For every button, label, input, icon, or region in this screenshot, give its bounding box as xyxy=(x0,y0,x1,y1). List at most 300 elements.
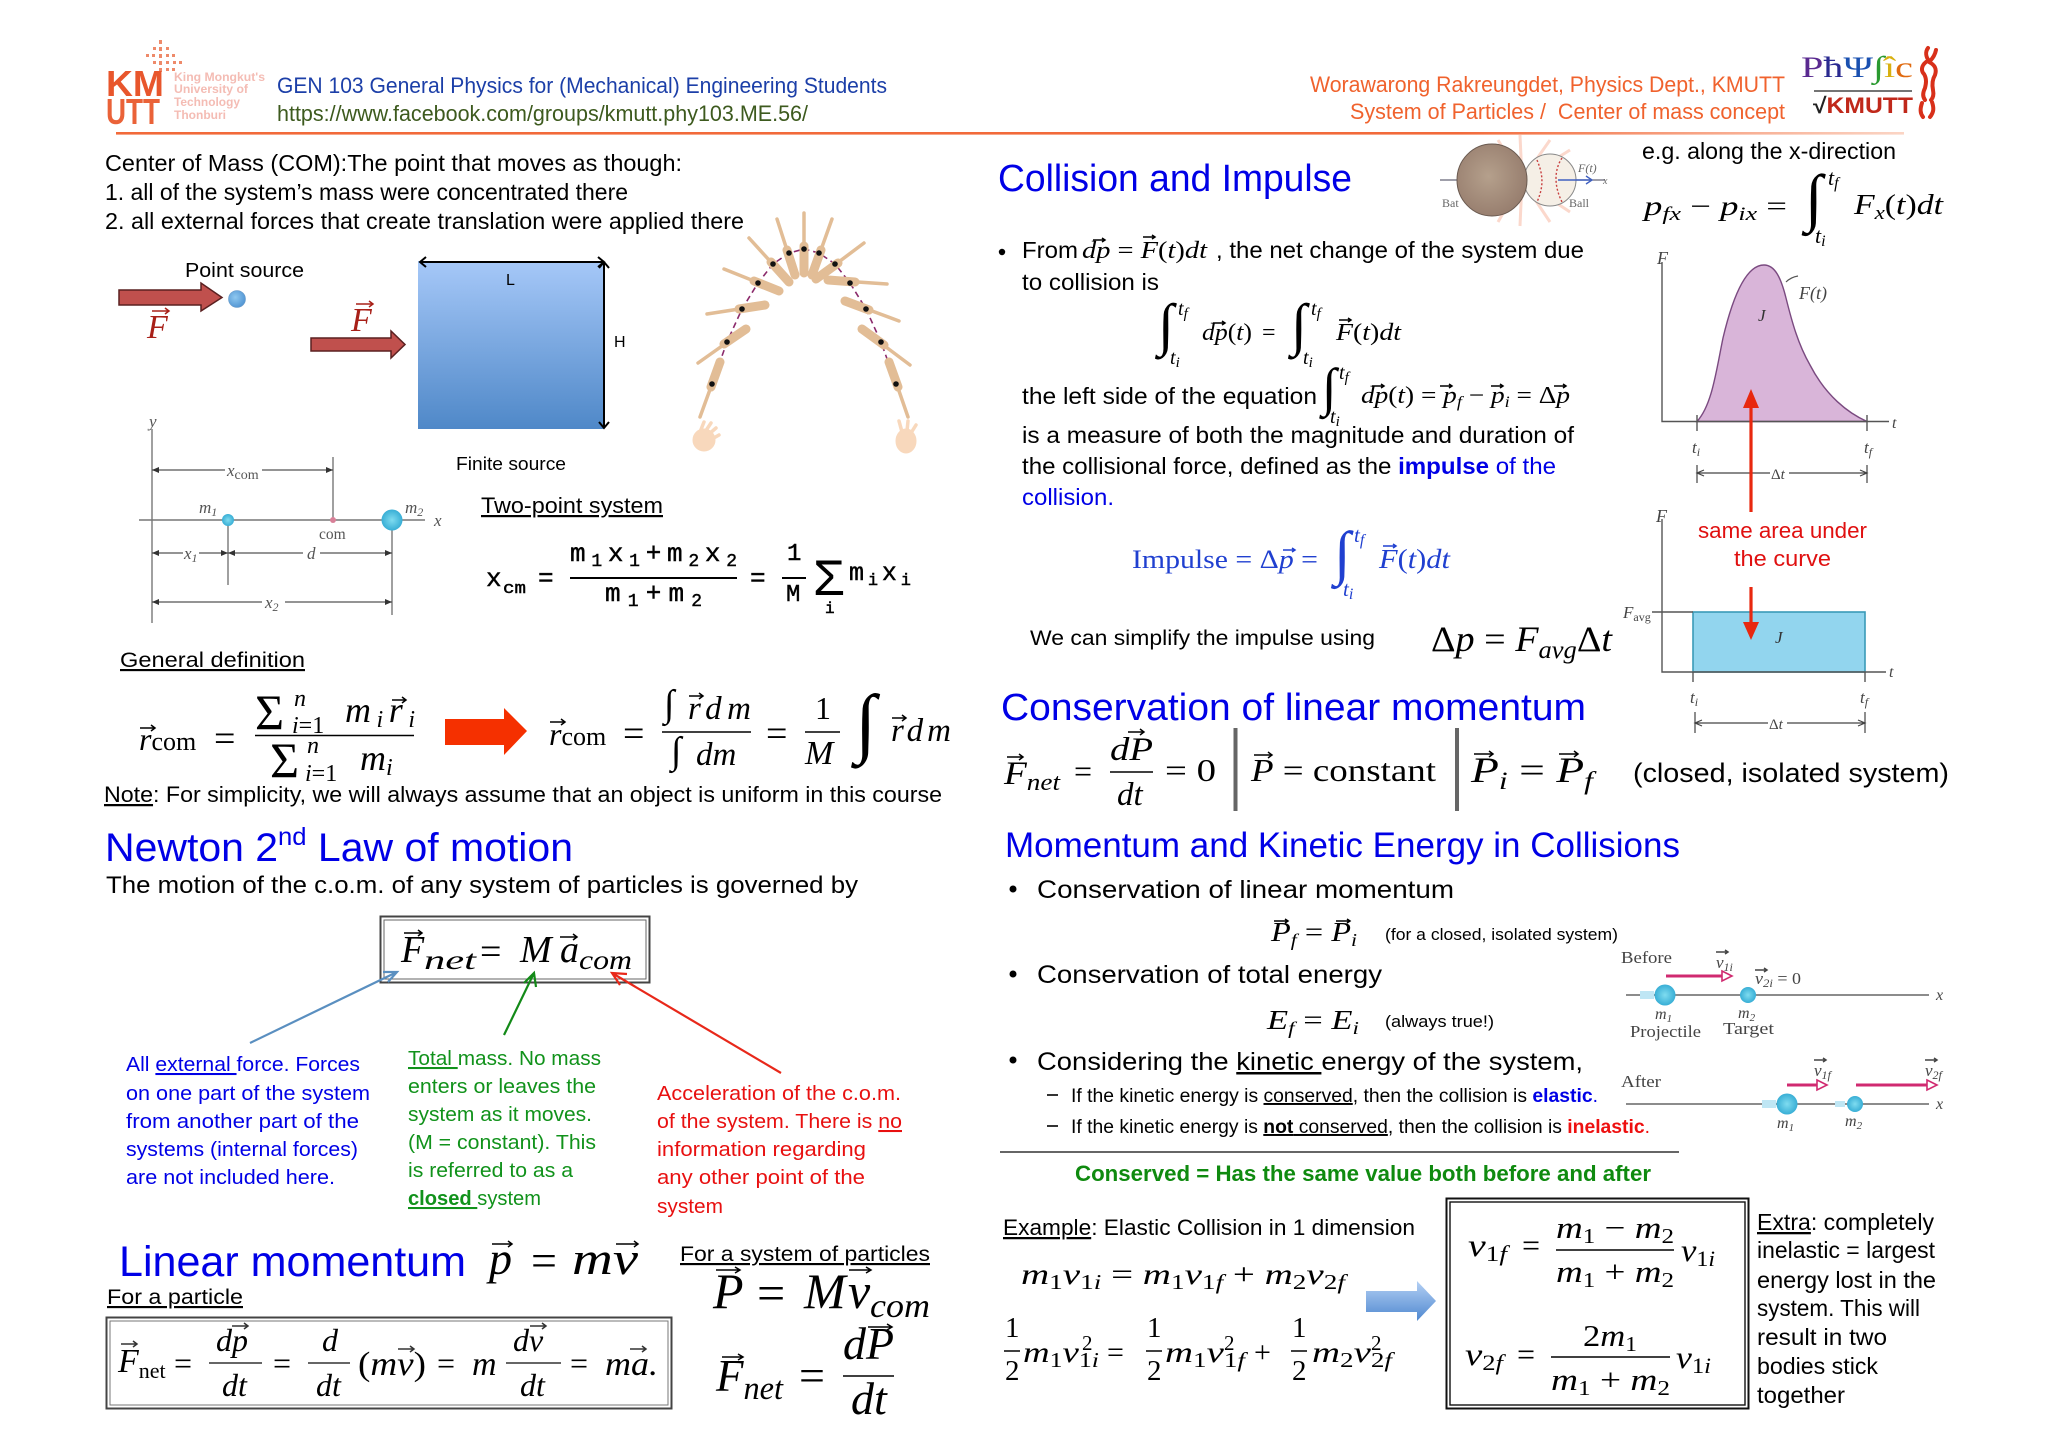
header: KMUTT logo: UTT xyxy=(106,91,160,132)
equation: com continuous: rdm xyxy=(688,691,751,727)
panel: newton second law xyxy=(105,823,902,1218)
equation: Pi = Pf: = xyxy=(1508,750,1556,790)
equation: two-point center of mass: +m xyxy=(646,579,684,609)
equation: com discrete: i xyxy=(408,707,415,733)
equation: x-direction impulse: fx xyxy=(1662,204,1682,225)
chart: force curve F(t) xyxy=(1656,248,1897,483)
label: point source: Point source xyxy=(185,259,304,282)
text: left side of the equation: p xyxy=(1491,383,1503,409)
equation: momentum: m xyxy=(1021,1258,1043,1291)
illustration: tossed bat trajectory xyxy=(693,213,916,453)
result box: final velocities: m xyxy=(1635,1254,1657,1289)
equation: dp = Favg dt: avg xyxy=(1539,637,1577,664)
chart: before collision: 2 xyxy=(1750,1012,1756,1024)
equation: P = M v_com: com xyxy=(870,1288,930,1325)
chart: average force rectangle: Δt xyxy=(1769,717,1784,733)
heading: newton 2nd law: Law of motion xyxy=(307,826,573,870)
chart: two-point com diagram: 1 xyxy=(192,551,198,565)
equation: integral of dp: t xyxy=(1303,347,1309,369)
result box: final velocities: 1f xyxy=(1486,1241,1506,1266)
header: KMUTT logo: University of xyxy=(174,84,248,96)
heading: momentum and kinetic energy: Momentum and Kinetic Energy in Collisions xyxy=(1005,826,1680,865)
equation: momentum: 2f xyxy=(1324,1270,1343,1294)
chart: after collision: v xyxy=(1814,1061,1822,1080)
result box: final velocities: v xyxy=(1681,1232,1695,1268)
chart: two-point com diagram: x xyxy=(433,511,442,530)
illustration: bat and ball: Ball xyxy=(1569,196,1590,210)
chart: after collision: After xyxy=(1621,1072,1661,1091)
arrow: green to mass xyxy=(504,973,536,1035)
text: extra note: inelastic = largest xyxy=(1757,1237,1936,1263)
center of mass definition: 1. all of the system’s mass were concentrated there xyxy=(105,179,628,205)
heading: conservation of linear momentum: Conservation of linear momentum xyxy=(1001,687,1586,729)
equation: kinetic energy: 2 xyxy=(1371,1331,1382,1355)
equation box: derivative of momentum: m xyxy=(472,1346,497,1383)
result box: final velocities: 2 xyxy=(1661,1224,1674,1248)
equation: two-point center of mass: m xyxy=(849,559,864,588)
equation box: Fnet = M a_com: net xyxy=(424,945,478,975)
equation: kinetic energy: v xyxy=(1207,1336,1225,1369)
equation: F_net = dP/dt: net xyxy=(744,1371,784,1407)
label: same area under the curve xyxy=(1698,518,1867,571)
equation: momentum: v xyxy=(1185,1258,1203,1291)
equation: two-point center of mass: i xyxy=(901,572,911,591)
chart: average force rectangle: F xyxy=(1623,603,1633,622)
text: extra note xyxy=(1757,1209,1936,1408)
equation: x-direction impulse: F xyxy=(1854,190,1871,221)
equation: kinetic energy: 2 xyxy=(1005,1355,1020,1387)
chart: two-point com diagram xyxy=(139,412,442,623)
equation: x-direction impulse: x xyxy=(1873,203,1886,224)
illustration: bat and ball: Bat xyxy=(1442,196,1459,210)
text: from dp = F dt: to collision is xyxy=(1022,269,1159,295)
equation box: derivative of momentum: dt xyxy=(316,1367,342,1403)
equation: integral of dp: F(t)dt xyxy=(1335,320,1403,346)
heading: linear momentum: Linear momentum xyxy=(119,1238,466,1286)
text: extra note: energy lost in the xyxy=(1757,1267,1936,1293)
chart: after collision: m xyxy=(1845,1113,1857,1130)
text: left side of the equation: i xyxy=(1336,414,1340,430)
text: impulse definition xyxy=(1022,422,1575,510)
heading: two-point system: Two-point system xyxy=(481,493,663,518)
equation box: derivative of momentum: = xyxy=(174,1345,192,1381)
annotation: external force xyxy=(126,1053,370,1189)
equation: p = mv: p xyxy=(486,1233,512,1284)
equation: com discrete: m xyxy=(345,690,371,730)
header: PhysIc KMUTT logo: PħΨ∫îc xyxy=(1801,51,1913,86)
chart: force curve F(t): F xyxy=(1656,248,1669,268)
equation box: derivative of momentum: F xyxy=(118,1343,139,1380)
result box: final velocities xyxy=(1446,1198,1748,1408)
equation: dP/dt = 0: = xyxy=(1074,753,1092,789)
equation: P = M v_com: = xyxy=(757,1265,785,1321)
chart: two-point com diagram: y xyxy=(147,412,157,431)
sub-bullet: inelastic: If the kinetic energy is not conserved, then the collision is inelastic. xyxy=(1071,1116,1650,1138)
panel: linear momentum xyxy=(106,1233,930,1424)
equation: com continuous: = xyxy=(623,713,644,755)
bullet: conservation of total energy: Conservation of total energy xyxy=(1037,961,1383,989)
chart: average force rectangle: t xyxy=(1690,688,1695,707)
label: for a system of particles: For a system of particles xyxy=(680,1242,930,1266)
illustration: bat and ball: F(t) xyxy=(1577,161,1597,175)
result box: final velocities: m xyxy=(1556,1254,1578,1289)
equation: Ef = Ei: E xyxy=(1331,1005,1348,1035)
text: left side of the equation xyxy=(1022,359,1570,430)
chart: two-point com diagram: 2 xyxy=(273,600,279,614)
chart: average force rectangle: i xyxy=(1695,695,1698,709)
divider rule xyxy=(1000,1151,1679,1153)
equation: kinetic energy: 1i xyxy=(1079,1348,1098,1372)
header: KMUTT logo: King Mongkut's xyxy=(174,72,265,84)
illustration: bat and ball: x xyxy=(1602,176,1608,187)
equation: kinetic energy: 2 xyxy=(1340,1348,1354,1372)
label: for a particle: For a particle xyxy=(107,1285,243,1309)
text: example heading: Example: Elastic Collision in 1 dimension xyxy=(1003,1215,1415,1240)
equation box: derivative of momentum: dt xyxy=(222,1367,248,1403)
text: left side of the equation: f xyxy=(1457,394,1465,411)
chart: two-point com diagram: m xyxy=(405,498,417,517)
chart: average force rectangle: J xyxy=(1775,628,1784,647)
equation: momentum: = xyxy=(1101,1258,1143,1291)
equation: Pi = Pf: f xyxy=(1584,768,1597,795)
equation: momentum: 1f xyxy=(1202,1270,1221,1294)
equation: kinetic energy: 1 xyxy=(1193,1348,1207,1372)
result box: final velocities: 1i xyxy=(1696,1246,1714,1271)
equation: x-direction impulse: = xyxy=(1757,191,1787,221)
equation: two-point center of mass: 2 xyxy=(688,552,699,572)
equation box: derivative of momentum: (mv) xyxy=(358,1346,426,1383)
equation: integral of dp: f xyxy=(1184,306,1190,322)
chart: average force rectangle xyxy=(1622,506,1894,733)
equation: integral of dp: = xyxy=(1262,320,1276,346)
chart: force curve F(t): F(t) xyxy=(1798,283,1827,304)
divider: bar one xyxy=(1234,728,1238,811)
header: author: Worawarong Rakreungdet, Physics Dept., KMUTT xyxy=(1310,72,1785,97)
equation: P = M v_com xyxy=(712,1263,930,1325)
equation: kinetic energy: 2 xyxy=(1292,1355,1306,1387)
equation: com discrete: m xyxy=(360,738,386,778)
equation: Ef = Ei: E xyxy=(1267,1005,1284,1035)
equation: com discrete: i=1 xyxy=(305,761,337,787)
equation: Pf = Pi: = xyxy=(1297,917,1331,947)
arrow: red to acceleration xyxy=(612,973,781,1073)
force label F finite: F xyxy=(350,302,373,339)
equation: Ef = Ei: f xyxy=(1288,1018,1298,1038)
chart: force curve F(t): t xyxy=(1892,415,1897,432)
equation: impulse xyxy=(1132,520,1452,603)
equation: two-point center of mass: 1 xyxy=(591,552,602,572)
text: along x direction: e.g. along the x-direction xyxy=(1642,138,1896,164)
equation: two-point center of mass: x xyxy=(608,539,623,569)
block dimensions L and H: L xyxy=(506,272,515,289)
annotation: acceleration: any other point of the xyxy=(657,1166,865,1189)
equation: two-point center of mass: 2 xyxy=(691,592,702,612)
force label F: F xyxy=(146,309,169,346)
text: from dp = F dt: From xyxy=(1022,237,1078,263)
equation: integral of dp: t xyxy=(1178,298,1184,320)
equation: Pf = Pi: (for a closed, isolated system) xyxy=(1385,926,1618,944)
result box: final velocities: v xyxy=(1676,1339,1690,1375)
header: KMUTT logo: Technology xyxy=(174,97,241,109)
result box: final velocities: 1 xyxy=(1578,1376,1591,1400)
equation: x-direction impulse: i xyxy=(1821,233,1826,250)
text: left side of the equation: f xyxy=(1345,370,1351,386)
icon: point source ball xyxy=(228,290,246,308)
heading: general definition: General definition xyxy=(120,648,305,672)
equation: kinetic energy: v xyxy=(1354,1336,1372,1369)
result box: final velocities: 2 xyxy=(1657,1376,1670,1400)
equation: P = M v_com: v xyxy=(848,1263,871,1319)
equation: com continuous: = xyxy=(766,713,787,755)
equation: kinetic energy: 1 xyxy=(1050,1348,1063,1372)
equation: impulse: i xyxy=(1349,586,1353,603)
equation: kinetic energy: = xyxy=(1107,1336,1124,1369)
header: course title: GEN 103 General Physics for (Mechanical) Engineering Students xyxy=(277,73,887,98)
chart: before collision: = 0 xyxy=(1773,969,1801,988)
equation: Pf = Pi xyxy=(1270,917,1618,950)
equation: Ef = Ei: (always true!) xyxy=(1385,1013,1494,1031)
chart: before collision: v xyxy=(1755,969,1763,988)
equation: Pi = Pf: i xyxy=(1499,768,1508,795)
equation: kinetic energy: 1 xyxy=(1147,1312,1162,1344)
equation: x-direction impulse: ∫ xyxy=(1801,162,1826,237)
equation: P = M v_com: M xyxy=(803,1263,848,1319)
chart: two-point com diagram: 2 xyxy=(417,505,423,519)
equation: Ef = Ei xyxy=(1266,1005,1494,1038)
equation: dP/dt = 0: net xyxy=(1027,770,1061,796)
annotation: external force: on one part of the system xyxy=(126,1082,370,1105)
equation: kinetic energy: 1 xyxy=(1005,1312,1020,1344)
equation: P constant: P = constant xyxy=(1250,752,1436,788)
equation: Ef = Ei: i xyxy=(1353,1018,1359,1038)
equation: two-point center of mass: x xyxy=(705,539,720,569)
result box: final velocities: = xyxy=(1517,1336,1535,1372)
bullet: conservation of linear momentum: Conservation of linear momentum xyxy=(1037,876,1454,904)
equation: x-direction impulse: t xyxy=(1815,223,1821,248)
result box: final velocities: + xyxy=(1591,1362,1630,1397)
equation: com discrete: i xyxy=(377,707,383,733)
text: left side of the equation: t xyxy=(1330,406,1336,428)
equation: kinetic energy: 2 xyxy=(1082,1331,1092,1355)
result box: final velocities: 2f xyxy=(1482,1350,1502,1375)
result box: final velocities: 2m xyxy=(1583,1318,1623,1353)
equation: dp = Favg dt: Δp = F xyxy=(1431,619,1537,659)
equation: two-point center of mass: cm xyxy=(503,580,526,599)
chart: average force rectangle: t xyxy=(1889,664,1894,681)
chart: after collision: 2f xyxy=(1933,1068,1944,1082)
equation: x-direction impulse: t xyxy=(1828,165,1834,190)
equation: com continuous: ∫ xyxy=(669,730,684,774)
chart: two-point com diagram: d xyxy=(307,544,316,563)
equation: F_net = dP/dt: F xyxy=(716,1350,744,1401)
equation: Pf = Pi: f xyxy=(1291,930,1300,950)
equation: momentum: + xyxy=(1223,1258,1265,1291)
annotation: total mass: enters or leaves the xyxy=(408,1075,596,1098)
chart: force curve F(t): J xyxy=(1758,306,1767,325)
equation: momentum: 1 xyxy=(1171,1270,1185,1294)
chart: before collision: v xyxy=(1716,953,1724,972)
result box: final velocities: v xyxy=(1468,1227,1482,1263)
result box: final velocities: 2 xyxy=(1661,1268,1674,1292)
chart: force curve F(t): t xyxy=(1864,438,1869,457)
annotation: total mass: Total mass. No mass xyxy=(408,1047,601,1070)
equation box: derivative of momentum: dp xyxy=(216,1322,248,1358)
equation: kinetic energy: m xyxy=(1312,1336,1334,1369)
equation box: derivative of momentum: net xyxy=(139,1358,166,1383)
annotation: total mass: closed system xyxy=(408,1187,541,1210)
text: from dp = F dt xyxy=(999,235,1584,295)
chart: before collision: Before xyxy=(1621,948,1672,967)
equation: kinetic energy: m xyxy=(1023,1336,1045,1369)
chart: before collision: 2i xyxy=(1763,976,1773,990)
text: left side of the equation: p xyxy=(1556,383,1568,409)
equation: momentum: m xyxy=(1265,1258,1286,1291)
equation: momentum: 1i xyxy=(1080,1270,1100,1294)
chart: average force rectangle: F xyxy=(1655,506,1668,526)
equation: p = mv xyxy=(486,1233,639,1286)
result box: final velocities: 1 xyxy=(1583,1268,1595,1292)
equation: integral of dp: t xyxy=(1170,347,1176,369)
equation: integral of dp: ∫ xyxy=(1154,292,1177,360)
header: PhysIc KMUTT logo xyxy=(1801,48,1936,118)
chart: two-point com diagram: x xyxy=(227,461,235,480)
equation: two-point center of mass: 1 xyxy=(787,541,801,568)
arrow: down to rectangle area xyxy=(1743,587,1759,640)
note: uniform object: Note: For simplicity, we will always assume that an object is uniform in this course xyxy=(104,782,942,807)
equation: kinetic energy: 2 xyxy=(1224,1331,1234,1355)
center of mass definition: 2. all external forces that create translation were applied there xyxy=(105,208,744,234)
equation: F_net = dP/dt: dP xyxy=(843,1318,894,1369)
equation: com continuous: ∫ xyxy=(662,683,677,727)
equation: two-point center of mass: = xyxy=(750,564,766,594)
equation: x-direction impulse: ( xyxy=(1885,190,1896,221)
header: course URL: https://www.facebook.com/groups/kmutt.phy103.ME.56/ xyxy=(277,101,809,126)
chart: after collision: x xyxy=(1935,1096,1943,1113)
equation: dP/dt = 0: = 0 xyxy=(1165,752,1216,788)
equation: P = M v_com: P xyxy=(712,1263,744,1319)
chart: after collision: m xyxy=(1777,1115,1789,1132)
equation: F_net = dP/dt xyxy=(715,1318,894,1424)
equation: com discrete: rcom xyxy=(139,721,196,757)
finite source block xyxy=(418,261,604,429)
annotation: acceleration: Acceleration of the c.o.m. xyxy=(657,1082,901,1105)
panel: x-direction force graphs xyxy=(1622,138,1944,733)
equation: com discrete: r xyxy=(389,690,404,730)
equation: kinetic energy: 1 xyxy=(1292,1312,1306,1344)
equation: dP/dt = 0: dP xyxy=(1110,732,1153,768)
equation: integral of dp: f xyxy=(1317,306,1323,322)
text: impulse definition: collision. xyxy=(1022,484,1114,510)
equation: two-point center of mass: x xyxy=(882,559,897,588)
equation box: Fnet = M a_com: M xyxy=(519,929,554,971)
equation: dP/dt = 0: F xyxy=(1004,756,1024,792)
equation: kinetic energy: 1f xyxy=(1224,1348,1243,1372)
result box: final velocities: 1i xyxy=(1692,1353,1710,1378)
equation: com discrete: i=1 xyxy=(292,713,324,739)
equation: impulse: F(t)dt xyxy=(1378,544,1452,574)
heading: collision and impulse: Collision and Impulse xyxy=(998,158,1352,200)
equation: two-point center of mass: x xyxy=(486,564,502,594)
panel: center of mass xyxy=(104,150,951,807)
equation: kinetic energy: 2 xyxy=(1147,1355,1162,1387)
equation: two-point center of mass: i xyxy=(825,600,835,618)
header divider xyxy=(116,132,1904,135)
equation: p = mv: mv xyxy=(572,1233,639,1284)
chart: before collision: 1 xyxy=(1667,1013,1672,1025)
equation box: derivative of momentum: dv xyxy=(513,1322,544,1358)
result box: final velocities: 1 xyxy=(1625,1332,1637,1356)
equation: two-point center of mass: 1 xyxy=(629,552,640,572)
equation: two-point center of mass: m xyxy=(605,579,621,609)
chart: average force rectangle: avg xyxy=(1633,610,1651,624)
heading: newton 2nd law: nd xyxy=(278,823,307,851)
text: left side of the equation: i xyxy=(1505,394,1510,411)
chart: two-point com diagram: com xyxy=(319,526,346,543)
chart: before collision: Target xyxy=(1723,1019,1774,1038)
annotation: total mass xyxy=(408,1047,601,1210)
annotation: external force: are not included here. xyxy=(126,1166,335,1189)
equation: two-point center of mass: 1 xyxy=(628,592,639,612)
chart: two-point com diagram: x xyxy=(184,544,192,563)
equation: impulse: t xyxy=(1354,523,1360,547)
chart: after collision: v xyxy=(1925,1061,1933,1080)
equation box: Fnet = M a_com: com xyxy=(579,945,632,975)
annotation: total mass: system as it moves. xyxy=(408,1103,592,1126)
equation: Pi = Pf: P xyxy=(1556,750,1578,790)
text: impulse definition: the collisional force, defined as the impulse of the xyxy=(1022,453,1556,479)
header: topic: System of Particles / Center of mass concept xyxy=(1350,99,1785,124)
equation: x-direction impulse xyxy=(1641,162,1944,250)
text: conserved definition: Conserved = Has the same value both before and after xyxy=(1075,1161,1651,1186)
annotation: external force: from another part of the xyxy=(126,1110,359,1133)
text: simplify the impulse: We can simplify the impulse using xyxy=(1030,626,1375,650)
equation: F_net = dP/dt: dt xyxy=(851,1373,888,1424)
header: KMUTT logo xyxy=(106,40,265,132)
equation: com discrete: Σ xyxy=(255,684,284,740)
equation: Pf = Pi: P xyxy=(1271,917,1288,947)
equation: x-direction impulse: p xyxy=(1720,191,1734,221)
text: extra note: Extra: completely xyxy=(1757,1209,1934,1235)
equation box: derivative of momentum: d xyxy=(322,1322,339,1358)
equation: dp = Favg dt: t xyxy=(1601,619,1611,659)
center of mass definition xyxy=(105,150,744,234)
equation: com discrete: n xyxy=(307,733,319,759)
chart: after collision: 1f xyxy=(1822,1068,1833,1082)
annotation: total mass: (M = constant). This xyxy=(408,1131,596,1154)
header: KMUTT logo: KM xyxy=(106,63,164,104)
equation: kinetic energy: 2f xyxy=(1371,1348,1390,1372)
panel: elastic collision example xyxy=(1003,1198,1936,1408)
chart: before collision: 1i xyxy=(1724,960,1733,974)
result box: final velocities: 1 xyxy=(1583,1224,1595,1248)
annotation: acceleration: system xyxy=(657,1195,723,1218)
label: same area under the curve: same area under xyxy=(1698,518,1867,543)
chart: before collision: Projectile xyxy=(1630,1022,1701,1041)
text: motion of com: The motion of the c.o.m. of any system of particles is governed by xyxy=(106,872,858,899)
equation: kinetic energy: v xyxy=(1063,1336,1080,1369)
chart: two-point com diagram: x xyxy=(265,593,273,612)
chart: average force rectangle: f xyxy=(1865,695,1870,709)
panel: collision and impulse xyxy=(998,135,1613,664)
equation: kinetic energy: m xyxy=(1165,1336,1187,1369)
text: from dp = F dt: dp = F(t)dt xyxy=(1082,238,1209,264)
text: left side of the equation: t xyxy=(1339,362,1345,384)
equation: com continuous: rdm xyxy=(891,713,951,749)
equation: two-point center of mass: M xyxy=(786,582,800,609)
chart: before collision xyxy=(1621,948,1943,1041)
text: left side of the equation: dp(t) = p xyxy=(1361,383,1455,409)
equation: impulse: f xyxy=(1360,532,1367,549)
